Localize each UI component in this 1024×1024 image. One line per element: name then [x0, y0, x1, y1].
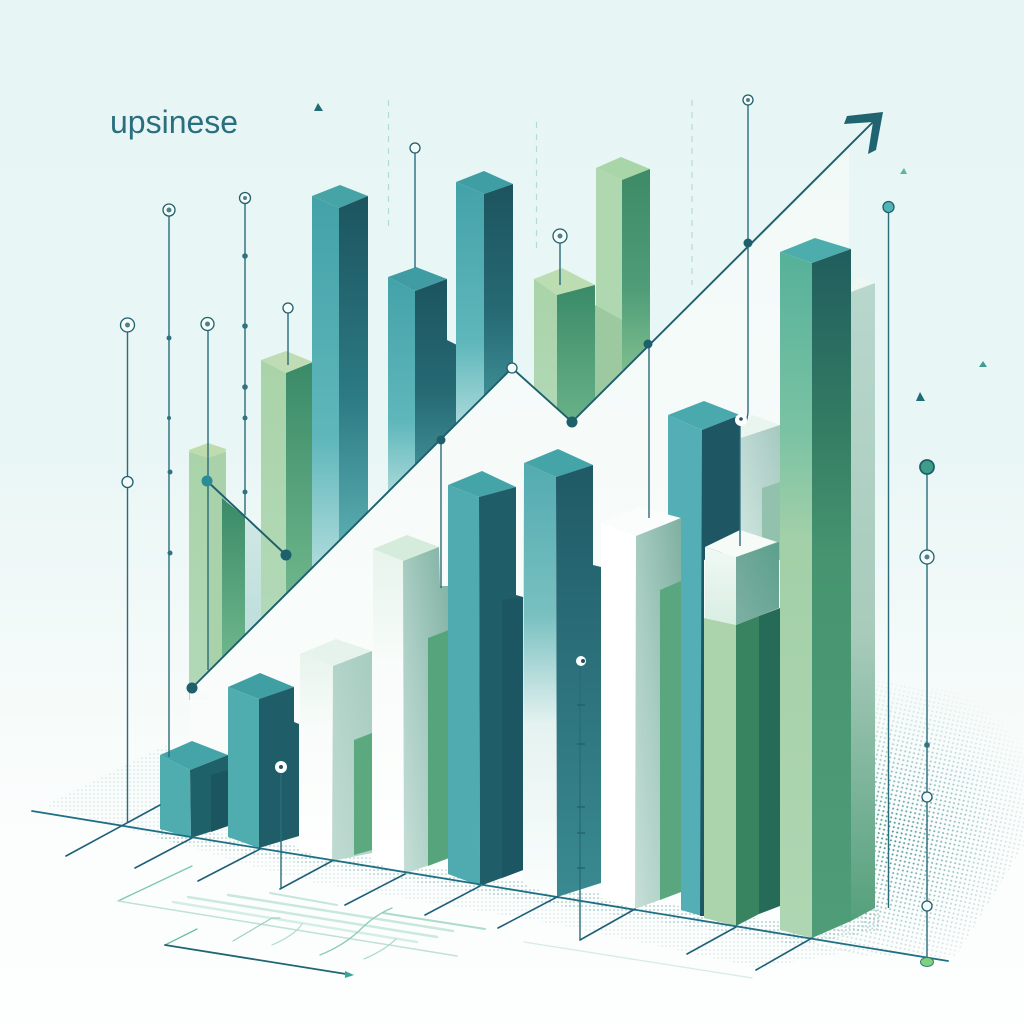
secondary trend segment — [207, 481, 286, 555]
icon: arrow head — [844, 112, 883, 154]
front bar 1 — [160, 741, 228, 838]
back bar 3 — [312, 185, 368, 570]
front bar 6 — [523, 449, 601, 897]
on-bar white markers — [275, 414, 747, 773]
dashed guide lines — [388, 100, 692, 285]
large teal marker — [920, 460, 934, 474]
trend line with arrow — [192, 112, 883, 688]
back bar 6 — [534, 268, 595, 440]
bottom arrow — [165, 945, 354, 978]
ring centres — [125, 98, 930, 560]
ring markers — [120, 95, 934, 911]
data point markers — [120, 95, 934, 966]
stippled ground texture — [45, 680, 1024, 968]
floating triangles — [314, 103, 987, 401]
title: upsinese — [110, 104, 238, 140]
front bar 2 — [228, 673, 299, 848]
front bar 7 (white) — [601, 507, 681, 909]
front bar 9 (box on green) — [704, 530, 780, 926]
back bar 7 — [595, 157, 650, 420]
front row bars — [160, 238, 875, 938]
back bar 5 — [456, 171, 513, 430]
teal accent markers — [883, 202, 894, 212]
pale back bar at right — [851, 276, 875, 921]
front bar 8 (tall teal) — [668, 401, 740, 916]
green base marker — [920, 958, 934, 966]
pale bar behind box — [741, 415, 780, 560]
front bar 10 (tallest) — [780, 238, 851, 938]
back bar 2 — [261, 351, 313, 620]
front bar 4 — [373, 535, 449, 874]
axis ticks — [66, 805, 812, 970]
pale area below trend line — [190, 150, 880, 900]
small stem dots — [166, 253, 930, 748]
faint legend lines on floor — [118, 866, 752, 978]
front bar 5 — [448, 471, 523, 886]
front bar 3 — [299, 639, 372, 861]
back row bars — [189, 157, 650, 700]
back bar 1 — [189, 443, 262, 700]
ground axis — [32, 805, 948, 970]
trend line nodes — [186, 238, 752, 694]
vertical marker stems — [128, 105, 927, 958]
stem tick marks — [577, 705, 585, 868]
back bar 4 — [388, 267, 457, 500]
